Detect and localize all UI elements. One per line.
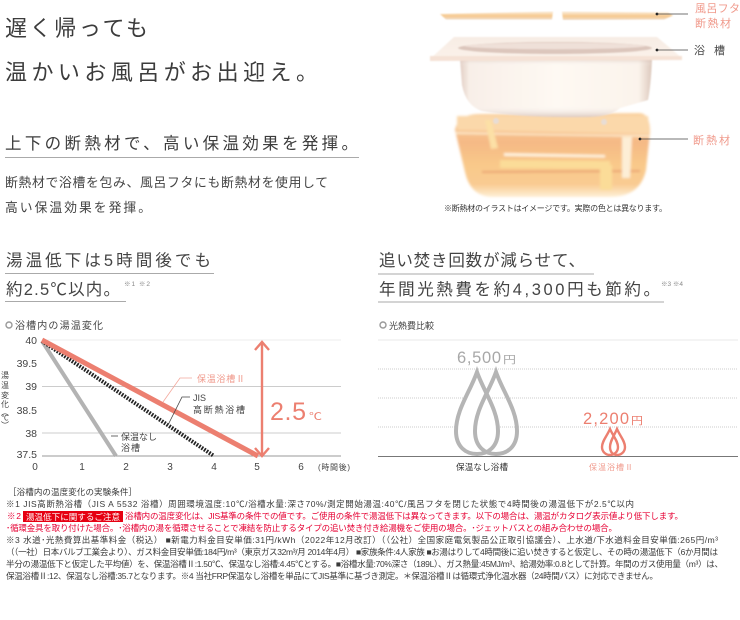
y axis labels: 37.5 bbox=[17, 449, 37, 461]
title: 遅く帰っても bbox=[5, 16, 148, 41]
label: no insulation bath: 保温なし浴槽 bbox=[456, 462, 508, 472]
y axis title bbox=[1, 370, 9, 430]
y axis labels: 40 bbox=[25, 335, 37, 347]
text block: insulation description: 高い保温効果を発揮。 bbox=[5, 200, 151, 215]
y axis title: ︵ bbox=[1, 408, 9, 417]
value: 2.5 degrees: 2.5 bbox=[270, 398, 306, 426]
y axis labels: 39 bbox=[25, 381, 37, 393]
footnotes: ※3 水道･光熱費算出基準料金（税込） ■新電力料金目安単価:31円/kWh（2022年12月改訂）（（公社）全国家庭電気製品公正取引協議会）、上水道/下水道料金目安単価:265円/m³ bbox=[6, 535, 718, 545]
label: no insulation: 浴槽 bbox=[121, 442, 140, 453]
line chart: bath water temperature bbox=[1, 319, 350, 473]
line: JIS bbox=[42, 341, 214, 456]
value: 2,200 yen: 2,200 bbox=[583, 410, 629, 428]
flame: no insulation bbox=[456, 372, 517, 454]
value: 2.5 degrees: ℃ bbox=[309, 412, 322, 423]
callout: bathtub: 浴 槽 bbox=[694, 44, 725, 57]
arrow: 2.5 degree drop bbox=[255, 342, 269, 456]
line chart: bath water temperature: (時間後) bbox=[318, 462, 350, 472]
callout: lid insulation: 風呂フタ bbox=[695, 2, 740, 15]
heading: energy cost bbox=[378, 251, 683, 302]
value: 2.5 degrees bbox=[270, 398, 322, 426]
value: 6,500 yen: 円 bbox=[503, 354, 516, 366]
chart title: 浴槽内の湯温変化 bbox=[15, 319, 103, 332]
text block: insulation description: 断熱材で浴槽を包み、風呂フタにも断熱材を使用して bbox=[5, 175, 328, 190]
y axis title: ︶ bbox=[1, 420, 9, 430]
y axis title: 変 bbox=[1, 390, 9, 400]
line: no insulation bbox=[42, 341, 116, 456]
label: no insulation bbox=[111, 431, 157, 453]
value: 6,500 yen: 6,500 bbox=[457, 349, 501, 367]
heading: energy cost: 追い焚き回数が減らせて、 bbox=[379, 251, 585, 270]
label: JIS bbox=[168, 393, 245, 425]
x axis labels: 1 bbox=[79, 462, 85, 473]
lid insulation bbox=[440, 12, 673, 20]
title: 温かいお風呂がお出迎え。 bbox=[5, 60, 318, 85]
heading: temperature drop: 湯温低下は5時間後でも bbox=[6, 251, 211, 270]
y axis title: 化 bbox=[1, 400, 9, 409]
footnotes: ※1 JIS高断熱浴槽（JIS A 5532 浴槽）周囲環境温度:10℃/浴槽水量:深さ70%/測定開始湯温:40℃/風呂フタを閉じた状態で4時間後の湯温低下が2.5℃以内 bbox=[6, 499, 634, 509]
callout: insulation: 断熱材 bbox=[693, 133, 730, 147]
y axis labels: 38 bbox=[25, 428, 37, 440]
callout: lid insulation: 断熱材 bbox=[695, 16, 731, 30]
label: no insulation: 保温なし bbox=[121, 431, 157, 442]
x axis labels: 2 bbox=[123, 462, 129, 473]
footnotes: ［浴槽内の温度変化の実験条件］ bbox=[8, 487, 137, 497]
heading: temperature drop: 約2.5℃以内。 bbox=[6, 280, 120, 299]
footnotes: 半分の湯温低下と仮定した平均値）を、保温浴槽Ⅱ:1.50℃、保温なし浴槽:4.45℃とする。■浴槽水量:70%深さ（189L）、ガス熱量:45MJ/m³、給湯効率:0.8として計算。年間のガス使用量（m³）は、 bbox=[6, 559, 723, 569]
illustration note: ※断熱材のイラストはイメージです。実際の色とは異なります。 bbox=[444, 203, 667, 213]
title bbox=[5, 16, 318, 85]
y axis labels: 39.5 bbox=[17, 358, 37, 370]
flame: bath II bbox=[602, 429, 625, 455]
label: bath II bbox=[163, 373, 245, 402]
caution bbox=[6, 511, 683, 533]
x axis labels: 4 bbox=[211, 462, 217, 473]
callout: lid insulation bbox=[656, 2, 740, 30]
flame chart: energy cost comparison bbox=[378, 320, 738, 472]
caution: 湯温低下に関するご注意 bbox=[26, 512, 120, 522]
footnotes bbox=[6, 487, 723, 581]
heading: temperature drop: ※1 ※2 bbox=[124, 281, 150, 288]
caution: ･循環金具を取り付けた場合。･浴槽内の湯を循環させることで凍結を防止するタイプの追い焚き付き給湯機をご使用の場合。･ジェットバスとの組み合わせの場合。 bbox=[6, 523, 617, 533]
y axis labels: 38.5 bbox=[17, 405, 37, 417]
bathtub bbox=[430, 37, 682, 125]
heading: energy cost: 年間光熱費を約4,300円も節約。 bbox=[379, 280, 660, 299]
chart title: 光熱費比較 bbox=[389, 320, 434, 331]
y axis labels bbox=[17, 335, 37, 461]
x axis labels: 3 bbox=[167, 462, 173, 473]
caution: 浴槽内の温度変化は、JIS基準の条件での値です。ご使用の条件で湯温低下は異なってきます。以下の場合は、湯温がカタログ表示値より低下します。 bbox=[125, 511, 683, 521]
bath insulation bbox=[455, 113, 650, 197]
label: bath II: 保温浴槽Ⅱ bbox=[589, 462, 633, 472]
heading: insulation: 上下の断熱材で、高い保温効果を発揮。 bbox=[5, 134, 358, 153]
x axis labels: 6 bbox=[298, 462, 304, 473]
y axis title: 湯 bbox=[1, 370, 9, 380]
x axis labels bbox=[32, 462, 304, 473]
value: 2,200 yen: 円 bbox=[631, 415, 643, 427]
heading: energy cost: ※3 ※4 bbox=[661, 281, 683, 288]
callout: insulation bbox=[639, 133, 730, 147]
illustration: exploded bathtub bbox=[430, 2, 740, 213]
y axis title: ℃ bbox=[2, 414, 8, 422]
label: JIS: 高断熱浴槽 bbox=[193, 404, 245, 415]
footnotes: （（一社）日本バルブ工業会より）、ガス料金目安単価:184円/m³（東京ガス32m³/月 2014年4月） ■家族条件:4人家族 ■お湯はりして4時間後に追い焚きすると仮定し、その時の湯温低下（6か月間は bbox=[6, 547, 718, 557]
text block: insulation description bbox=[5, 175, 328, 215]
label: JIS: JIS bbox=[193, 393, 206, 403]
callout: bathtub bbox=[656, 44, 725, 57]
line: heat-retaining bath II bbox=[42, 340, 258, 456]
heading: temperature drop bbox=[5, 251, 214, 302]
label: bath II: 保温浴槽Ⅱ bbox=[197, 373, 245, 384]
caution: ※2 bbox=[7, 511, 21, 521]
y axis title: 温 bbox=[1, 381, 9, 390]
x axis labels: 5 bbox=[254, 462, 260, 473]
x axis labels: 0 bbox=[32, 462, 38, 473]
footnotes: 保温浴槽Ⅱ:12、保温なし浴槽:35.7となります。※4 当社FRP保温なし浴槽を単品にてJIS基準に基づき測定。＊保温浴槽Ⅱは循環式浄化温水器（24時間バス）に対応できません。 bbox=[6, 571, 658, 581]
